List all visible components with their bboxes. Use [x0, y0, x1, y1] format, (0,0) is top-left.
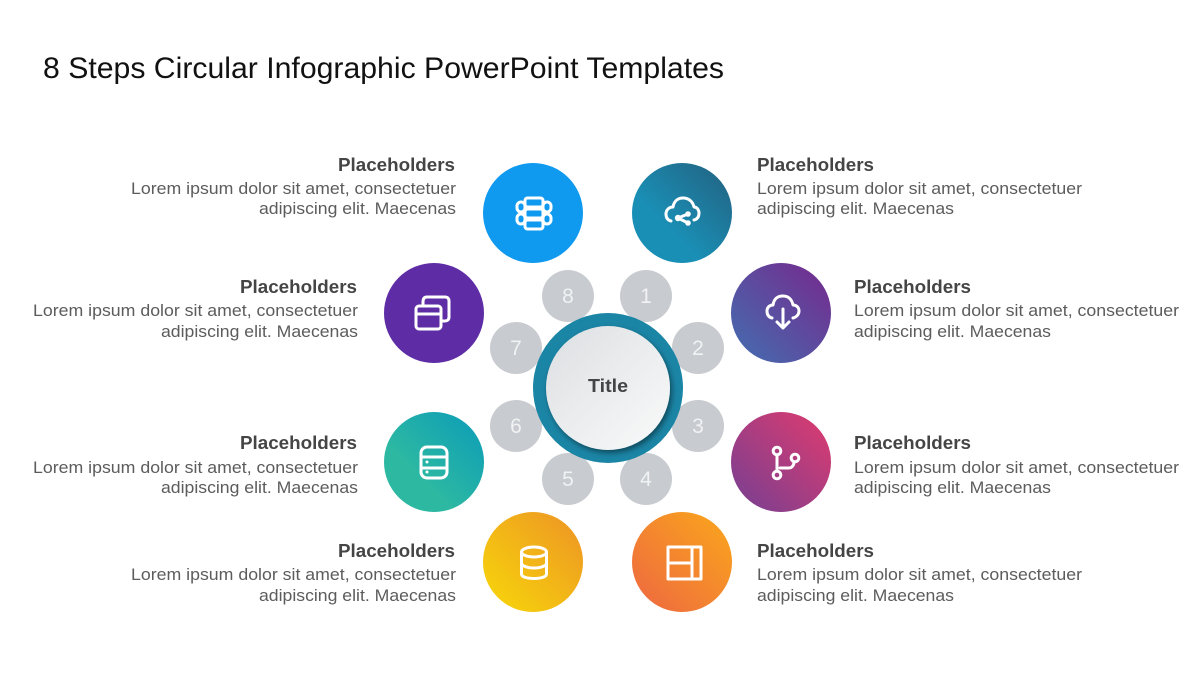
step 8: blue server	[483, 163, 583, 263]
text: step 4: Placeholders	[757, 540, 874, 561]
number badges: 6	[510, 415, 522, 438]
step 5: yellow cylinder	[483, 512, 583, 612]
text: step 8: Lorem ipsum dolor sit amet, consectetuer	[131, 179, 456, 198]
text: step 7	[33, 276, 358, 341]
text: step 1: adipiscing elit. Maecenas	[757, 199, 954, 218]
text: step 2: Placeholders	[854, 276, 971, 297]
text: step 2	[854, 276, 1179, 341]
text: step 8: Placeholders	[338, 154, 455, 175]
center title circle	[533, 313, 683, 463]
step 3: magenta branch	[731, 412, 831, 512]
title: 8 Steps Circular Infographic PowerPoint Templates	[43, 52, 724, 85]
text: step 4: adipiscing elit. Maecenas	[757, 586, 954, 605]
step 2: indigo cloud download	[731, 263, 831, 363]
number badges: 3	[692, 415, 704, 438]
text: step 4: Lorem ipsum dolor sit amet, consectetuer	[757, 565, 1082, 584]
text: step 2: Lorem ipsum dolor sit amet, consectetuer	[854, 301, 1179, 320]
text: step 7: adipiscing elit. Maecenas	[161, 322, 358, 341]
text: step 1	[757, 154, 1082, 218]
text: step 4	[757, 540, 1082, 605]
text: step 3: Placeholders	[854, 432, 971, 453]
text: step 8: adipiscing elit. Maecenas	[259, 199, 456, 218]
text: step 7: Placeholders	[240, 276, 357, 297]
step 1: teal cloud share	[632, 163, 732, 263]
step 7: purple windows	[384, 263, 484, 363]
text: step 7: Lorem ipsum dolor sit amet, consectetuer	[33, 301, 358, 320]
text: step 5: Lorem ipsum dolor sit amet, consectetuer	[131, 565, 456, 584]
step 6: green database	[384, 412, 484, 512]
text: step 8	[131, 154, 456, 218]
step 4: orange layout	[632, 512, 732, 612]
text: step 6: Placeholders	[240, 432, 357, 453]
text: step 6: adipiscing elit. Maecenas	[161, 478, 358, 497]
text: step 5: Placeholders	[338, 540, 455, 561]
text: step 5	[131, 540, 456, 605]
text: step 2: adipiscing elit. Maecenas	[854, 322, 1051, 341]
text: step 6	[33, 432, 358, 497]
number badges: 8	[562, 285, 574, 308]
number badges: 4	[640, 468, 652, 491]
number badges: 2	[692, 337, 704, 360]
text: step 3: adipiscing elit. Maecenas	[854, 478, 1051, 497]
number badges: 5	[562, 468, 574, 491]
number badges: 7	[510, 337, 522, 360]
number badges	[490, 270, 724, 505]
number badges: 1	[640, 285, 652, 308]
text: step 3: Lorem ipsum dolor sit amet, consectetuer	[854, 458, 1179, 477]
text: step 3	[854, 432, 1179, 497]
text: step 6: Lorem ipsum dolor sit amet, consectetuer	[33, 458, 358, 477]
text: step 5: adipiscing elit. Maecenas	[259, 586, 456, 605]
center title circle: Title	[588, 375, 628, 396]
text: step 1: Placeholders	[757, 154, 874, 175]
text: step 1: Lorem ipsum dolor sit amet, consectetuer	[757, 179, 1082, 198]
